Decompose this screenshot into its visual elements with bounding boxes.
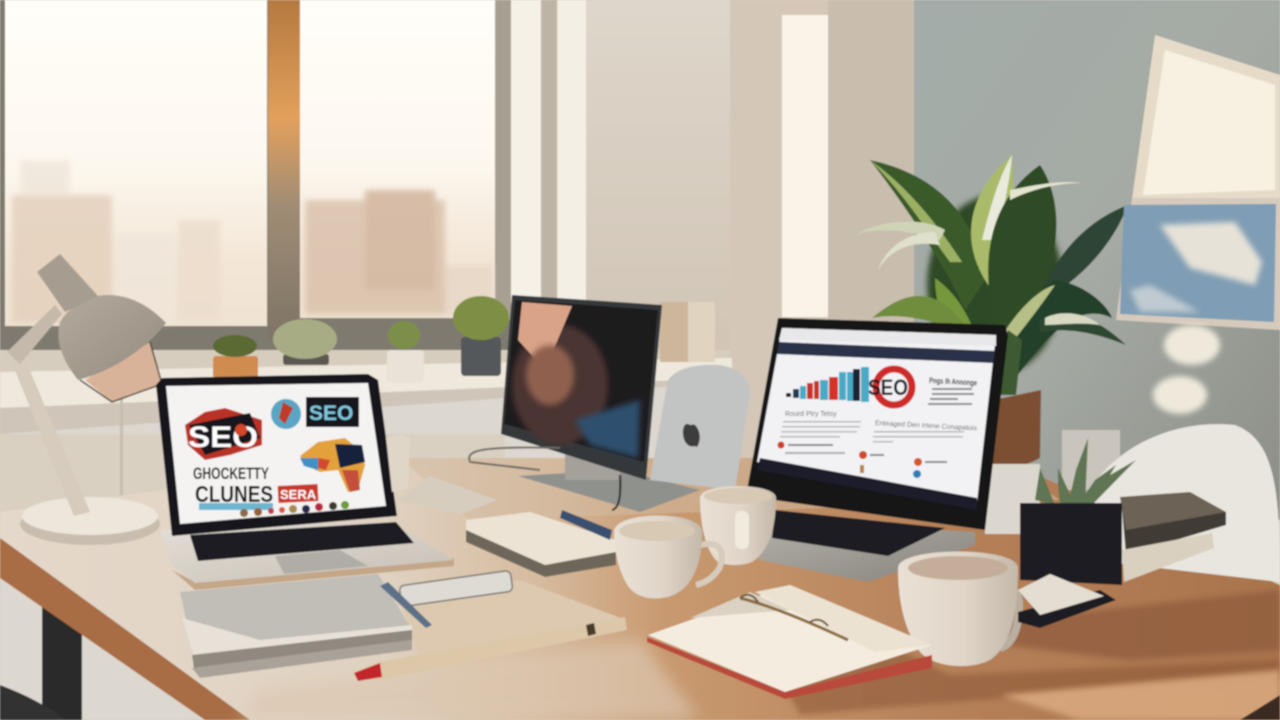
table leg <box>42 605 82 720</box>
desk <box>0 458 1280 720</box>
left laptop: GHOCKETTY <box>193 464 269 483</box>
left laptop: SEO <box>188 421 258 454</box>
small mug behind left laptop <box>386 435 410 492</box>
back mug <box>700 486 776 565</box>
notebooks, phone and pens on desk <box>180 476 627 681</box>
large mug <box>898 552 1019 666</box>
city buildings <box>12 160 493 323</box>
left laptop <box>156 374 454 590</box>
right laptop: Rourd Ptry Tetsy <box>785 411 837 418</box>
right laptop: Pngs Ih Annonge <box>929 376 978 388</box>
mugs <box>614 486 1019 666</box>
apple computer back <box>650 365 750 490</box>
wall mirror and sun patches <box>1116 35 1280 414</box>
left laptop: CLUNES <box>195 481 273 507</box>
desktop monitor <box>469 295 700 512</box>
right laptop: Enteaged Den Irtene Conapatois <box>875 420 978 432</box>
window <box>0 0 557 352</box>
left laptop: SERA <box>280 487 317 502</box>
radiator and white chair <box>985 424 1280 582</box>
large leafy plant <box>855 155 1128 467</box>
left laptop: SEO <box>309 402 353 425</box>
lamp <box>7 254 166 545</box>
right laptop: SEO <box>868 375 908 400</box>
office chair corner <box>0 685 65 720</box>
window sill and lower wall <box>0 350 732 524</box>
planter and books <box>1020 438 1226 585</box>
front mug <box>614 516 722 599</box>
open notebook with glasses <box>647 585 932 699</box>
glass frame behind lamp <box>80 342 162 402</box>
right laptop <box>746 318 1008 582</box>
potted plants on sill <box>213 296 715 382</box>
paper pad beside large mug <box>1018 574 1116 628</box>
